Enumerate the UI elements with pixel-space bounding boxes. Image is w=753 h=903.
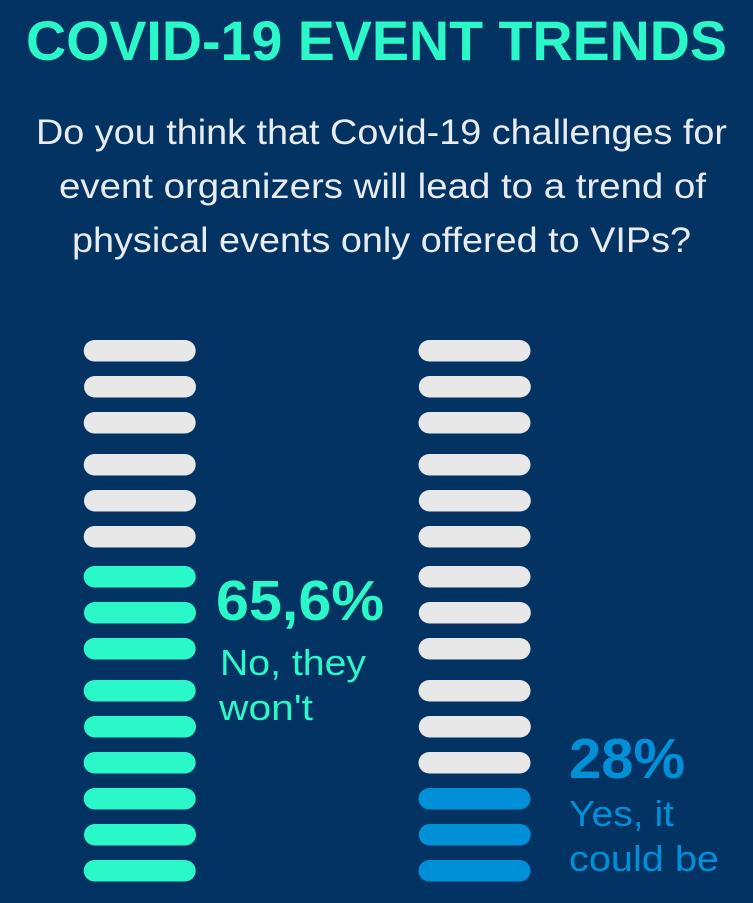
stat: 65,6% No, they won't: 65,6% (216, 569, 384, 633)
question text: Do you think that Covid-19 challenges for (36, 113, 727, 152)
stat: 65,6% No, they won't (216, 569, 384, 728)
bar column: Yes, it could be (28%) (418, 340, 531, 882)
stat: 28% Yes, it could be: 28% (569, 727, 685, 791)
bar column: No, they won't (65.6%) (84, 340, 196, 882)
stat: 28% Yes, it could be: could be (569, 838, 719, 879)
question text: event organizers will lead to a trend of (59, 167, 706, 206)
stat: 65,6% No, they won't: won't (218, 687, 313, 728)
stat: 65,6% No, they won't: No, they (220, 642, 366, 683)
stat: 28% Yes, it could be: Yes, it (569, 793, 674, 834)
stat: 28% Yes, it could be (569, 727, 719, 879)
question text (36, 113, 727, 260)
question text: physical events only offered to VIPs? (72, 221, 691, 260)
title: COVID-19 EVENT TRENDS (26, 9, 727, 72)
